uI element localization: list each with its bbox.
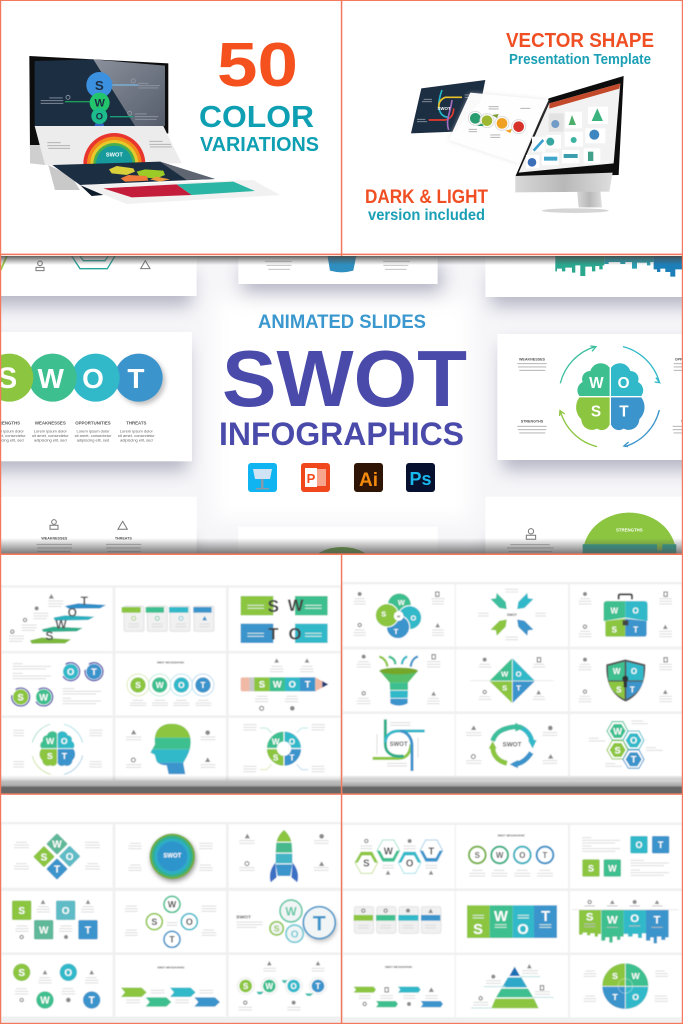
card: SWOT circles slide: Lorem ipsum dolor [76,429,110,434]
monitor with dark slide: O [96,111,103,121]
card: SWOT circles slide: THREATS [126,420,146,425]
slide: briefcase: W [611,607,619,616]
slide: donut: O [289,738,295,747]
slide: gradient rings: O [519,851,525,860]
slide: hexagons: W [613,726,622,736]
slide: circles with arrows: O [291,982,297,991]
slide: staircase: S [45,629,53,643]
subheading: version included: version included [368,207,485,224]
W circle [29,354,77,402]
card: SWOT circles slide: sit amet, consectetur [118,433,155,438]
slide: solid circles: O [64,968,72,979]
slide: ribbon swirl: SWOT [390,742,408,748]
card: brain slide: OPP [675,357,683,361]
heading: dark and light: DARK & LIGHT [365,187,488,208]
slide: pencil: W [273,680,282,690]
slide: square tiles: O [62,906,70,917]
icon: brain quadrants: T [619,404,629,421]
slide: square tiles small: S [588,863,594,873]
slide: outlined circles [125,896,216,947]
card: SWOT circles slide: WEAKNESSES [35,420,66,425]
T circle [115,354,163,402]
slide: circular arrows: SWOT [502,742,522,749]
slide: donut: W [272,738,280,747]
label: animated slides: ANIMATED SLIDES [258,312,426,333]
slide: colored columns: S [473,922,483,938]
slide: four ringed circles: W [39,692,48,702]
heading: variations: VARIATIONS [200,134,319,156]
card: bottom center slide [238,534,438,554]
monitor with dark slide: W [94,98,105,110]
slide: briefcase: T [633,625,638,634]
top and bottom section shadows [0,256,683,554]
card: SWOT circles slide: adipiscing elit, sed [120,437,153,442]
slide: colored columns: W [494,909,508,925]
slide: arrow labels: SWOT INFOGRAPHIC [385,965,412,969]
bottom shadow [0,775,342,791]
card: SWOT circles slide: sit amet, consectetur [32,433,69,438]
slide: hexagons: T [631,755,637,765]
icon: brain quadrants: W [589,375,604,392]
slide: square tiles: S [18,906,25,917]
slide: donut: S [273,754,279,763]
slide: funnel [357,655,440,706]
slide: head silhouette [126,723,215,775]
icon: photoshop [406,463,435,492]
card: SWOT circles slide: Lorem ipsum dolor [34,429,67,434]
slide: drip columns: W [607,914,618,926]
slide: outlined circles: T [169,935,175,945]
card: bottom left slide: THREATS [115,536,132,540]
slide: pencil [241,658,328,711]
slide: briefcase: S [612,625,618,634]
slide: hexagons: O [630,736,637,746]
slide: gradient rings: SWOT INFOGRAPHIC [498,834,525,838]
card: bottom right slide: STRENGTHS [616,527,643,532]
slide: pie: T [612,992,618,1002]
slide: square tiles small: T [658,840,664,850]
slide: square tiles small [582,836,669,877]
slide: pyramid [471,964,554,1008]
subtitle: infographics: INFOGRAPHICS [219,416,464,452]
monitor with dark slide [29,56,168,165]
icon: keynote [248,463,277,492]
soft card shadows [0,265,683,570]
slide: drip columns: T [654,914,661,926]
slide: hexagons [589,721,663,768]
slide: drip columns [572,900,679,943]
card: brain slide: WEAKNESSES [519,357,546,361]
dark slide: SWOT [437,106,451,111]
slide: diamond: W [501,670,509,679]
slide: converging arrows [478,589,546,640]
subheading: presentation template: Presentation Template [509,52,651,68]
slide: hexagon chain: W [384,846,394,857]
slide: circles with arrows: W [266,982,274,991]
slide: rotated squares: S [41,852,48,863]
slide: band cards [354,907,441,933]
card: brain slide: STRENGTHS [521,420,544,424]
slide: outlined circles: W [168,900,177,910]
slide: four cards [122,606,214,631]
slide: gradient rings: W [496,851,504,860]
slide: pencil: O [289,680,296,690]
slide: ring circles row: O [178,680,185,690]
card: brain slide [497,334,683,460]
slide: hexagon chain [355,839,443,875]
slide: solid circles: S [18,968,25,979]
slide: ring circles row: S [135,680,141,690]
slide: ring circles row [127,660,214,705]
slide: concentric circle: SWOT [163,854,182,860]
slide: petals: T [394,627,399,636]
slide: shield [579,658,672,702]
slide: pencil: T [305,680,311,690]
slide: shield: T [630,685,635,694]
dark slide [411,80,485,133]
heading: 50: 50 [217,31,298,100]
slide: staircase [9,594,106,644]
slide: hexagon chain: S [363,858,370,869]
slide: outlined circles: O [186,917,193,927]
slide: ring circles row: SWOT INFOGRAPHIC [157,660,184,664]
slide: diamond [470,658,554,703]
S circle [0,354,33,402]
slide: petals: O [410,614,416,623]
slide: four ringed circles: T [91,667,97,677]
slide: diamond: S [502,683,507,692]
slide: briefcase: O [633,607,639,616]
slide: shield: O [631,667,637,676]
slide: hexagons: S [615,745,621,755]
slide: square tiles small: W [608,863,617,873]
slide: donut [243,725,325,772]
slide: pie: W [632,971,641,981]
slide: pencil: S [259,680,265,690]
card: SWOT circles slide: sit amet, consectetur [75,433,112,438]
slide: petals: W [398,598,405,607]
top shadow [0,787,342,794]
panel: slide grid 2 [342,582,683,791]
desktop monitor [515,76,624,213]
slide: concentric circle [128,834,213,881]
card: SWOT circles slide: adipiscing elit, sed [34,437,67,442]
slide: pie [584,963,668,1009]
slide: donut: T [290,754,295,763]
slide: pie: S [612,971,618,981]
slide: staircase: O [68,606,77,620]
slide: shield: S [616,685,622,694]
slide: circular arrows [466,723,557,768]
slide: brain: T [62,751,68,761]
slide: staircase: W [55,617,67,631]
stacked slides: SWOT [106,152,123,158]
monitor with dark slide: S [95,78,104,93]
O circle [72,354,120,402]
slide: rotated squares: T [54,865,60,876]
panel: animated slides hero [0,253,683,582]
slide lorem: petals [354,592,445,635]
card: bottom right slide [486,497,682,554]
card: SWOT circles slide: Lorem ipsum dolor [120,429,153,434]
icon: brain quadrants: S [591,404,601,421]
slide: circles with arrows [237,961,326,1010]
card: top right slide with drips [485,253,683,297]
slide: diamond: T [516,683,521,692]
title: SWOT: SWOT [222,334,467,423]
panel: slide grid 1 [0,585,342,791]
slide: drip columns: S [586,912,594,924]
icon: illustrator: Ai [359,470,378,491]
slide: arrow blocks: T [268,625,278,644]
slide: chevron row: SWOT INFOGRAPHIC [157,966,185,970]
card: top center slide [238,256,438,284]
slide: four ringed circles: S [18,692,24,702]
slide: circles with arrows: T [316,982,321,991]
slide: ring circles row: T [200,680,206,690]
slide: ribbon swirl [373,719,425,771]
panel: slide grid 3 [0,787,342,1024]
slide: pie: O [632,992,639,1002]
slide: rotated squares [14,833,100,880]
icon: powerpoint: P [307,471,316,486]
slide: arrow labels [354,965,443,1007]
slide: arrow blocks [241,596,328,644]
icon: brain quadrants [576,363,645,430]
slide: petals [375,593,422,639]
slide: rotated squares: W [52,840,62,851]
slide: scaled rings: S [274,924,280,934]
panel: 50 color variations [29,31,319,204]
slide: gradient rings: S [475,851,481,860]
slide: gradient rings: T [543,851,548,860]
panel: vector shape presentation template [365,30,654,224]
slide: converging arrows: SWOT [507,613,517,617]
slide: petals: S [381,610,386,619]
slide: four ringed circles: O [67,667,74,677]
slide: brain: W [46,736,55,746]
slide: hexagon chain: T [428,846,434,857]
card: top left slide [0,253,197,296]
slide: colored columns [467,905,557,938]
slide: square tiles small: O [635,840,642,850]
bottom shadow [342,775,683,791]
slide: scaled rings: SWOT [236,914,251,920]
icon: powerpoint [301,463,330,492]
slide: gradient rings [469,834,553,876]
slide: rotated squares: O [66,852,74,863]
slide: outlined circles: S [151,917,157,927]
slide: ring circles row: W [156,680,164,690]
stacked slides [35,126,280,204]
slide: rocket [239,830,329,882]
card: SWOT circles slide: T [127,363,145,394]
slide: petals: or [397,614,401,618]
slide: hexagon chain: O [406,858,414,869]
slide: square tiles: T [85,925,91,936]
card: SWOT circles slide: W [37,363,64,394]
icon: brain quadrants: O [618,375,630,392]
slide: brain [13,724,103,774]
slide: brain: S [47,751,53,761]
card: SWOT circles slide [0,332,192,461]
heading: vector shape: VECTOR SHAPE [506,30,654,52]
slide: arrow blocks: W [288,596,304,615]
card: bottom left slide [1,497,196,554]
slide: scaled rings: W [285,905,297,919]
slide: scaled rings: T [313,911,326,935]
light slide [449,93,549,163]
card: SWOT circles slide: adipiscing elit, sed [77,437,109,442]
slide: shield: W [613,667,621,676]
slide: solid circles: W [40,996,50,1007]
slide: briefcase [579,592,672,637]
slide: diamond: O [516,670,522,679]
slide: scaled rings [236,900,337,942]
slide: colored columns: T [541,909,550,925]
slide: solid circles [13,964,100,1009]
slide: square tiles [12,900,98,939]
card: SWOT circles slide: O [82,363,104,394]
card: SWOT circles slide: OPPORTUNITIES [75,420,111,425]
slide: four ringed circles [12,663,103,706]
heading: color: COLOR [199,99,314,134]
slide: arrow blocks: O [288,625,301,644]
slide: circles with arrows: S [243,982,249,991]
slide: staircase: T [81,594,89,608]
slide: square tiles: W [39,925,49,936]
slide: arrow blocks: S [268,596,279,616]
panel: slide grid 4 [342,787,683,1024]
slide: scaled rings: O [291,930,299,941]
slide: chevron row [121,966,220,1007]
icon: illustrator [354,463,383,492]
slide: brain: O [61,736,68,746]
slide: solid circles: T [89,996,95,1007]
card: bottom left slide: WEAKNESSES [41,536,68,540]
icon: photoshop: Ps [409,469,432,489]
slide: colored columns: O [517,922,529,938]
cycle arrows [560,346,660,447]
slide: drip columns: O [630,913,639,925]
top shadow [342,787,683,794]
hero background [0,256,683,554]
